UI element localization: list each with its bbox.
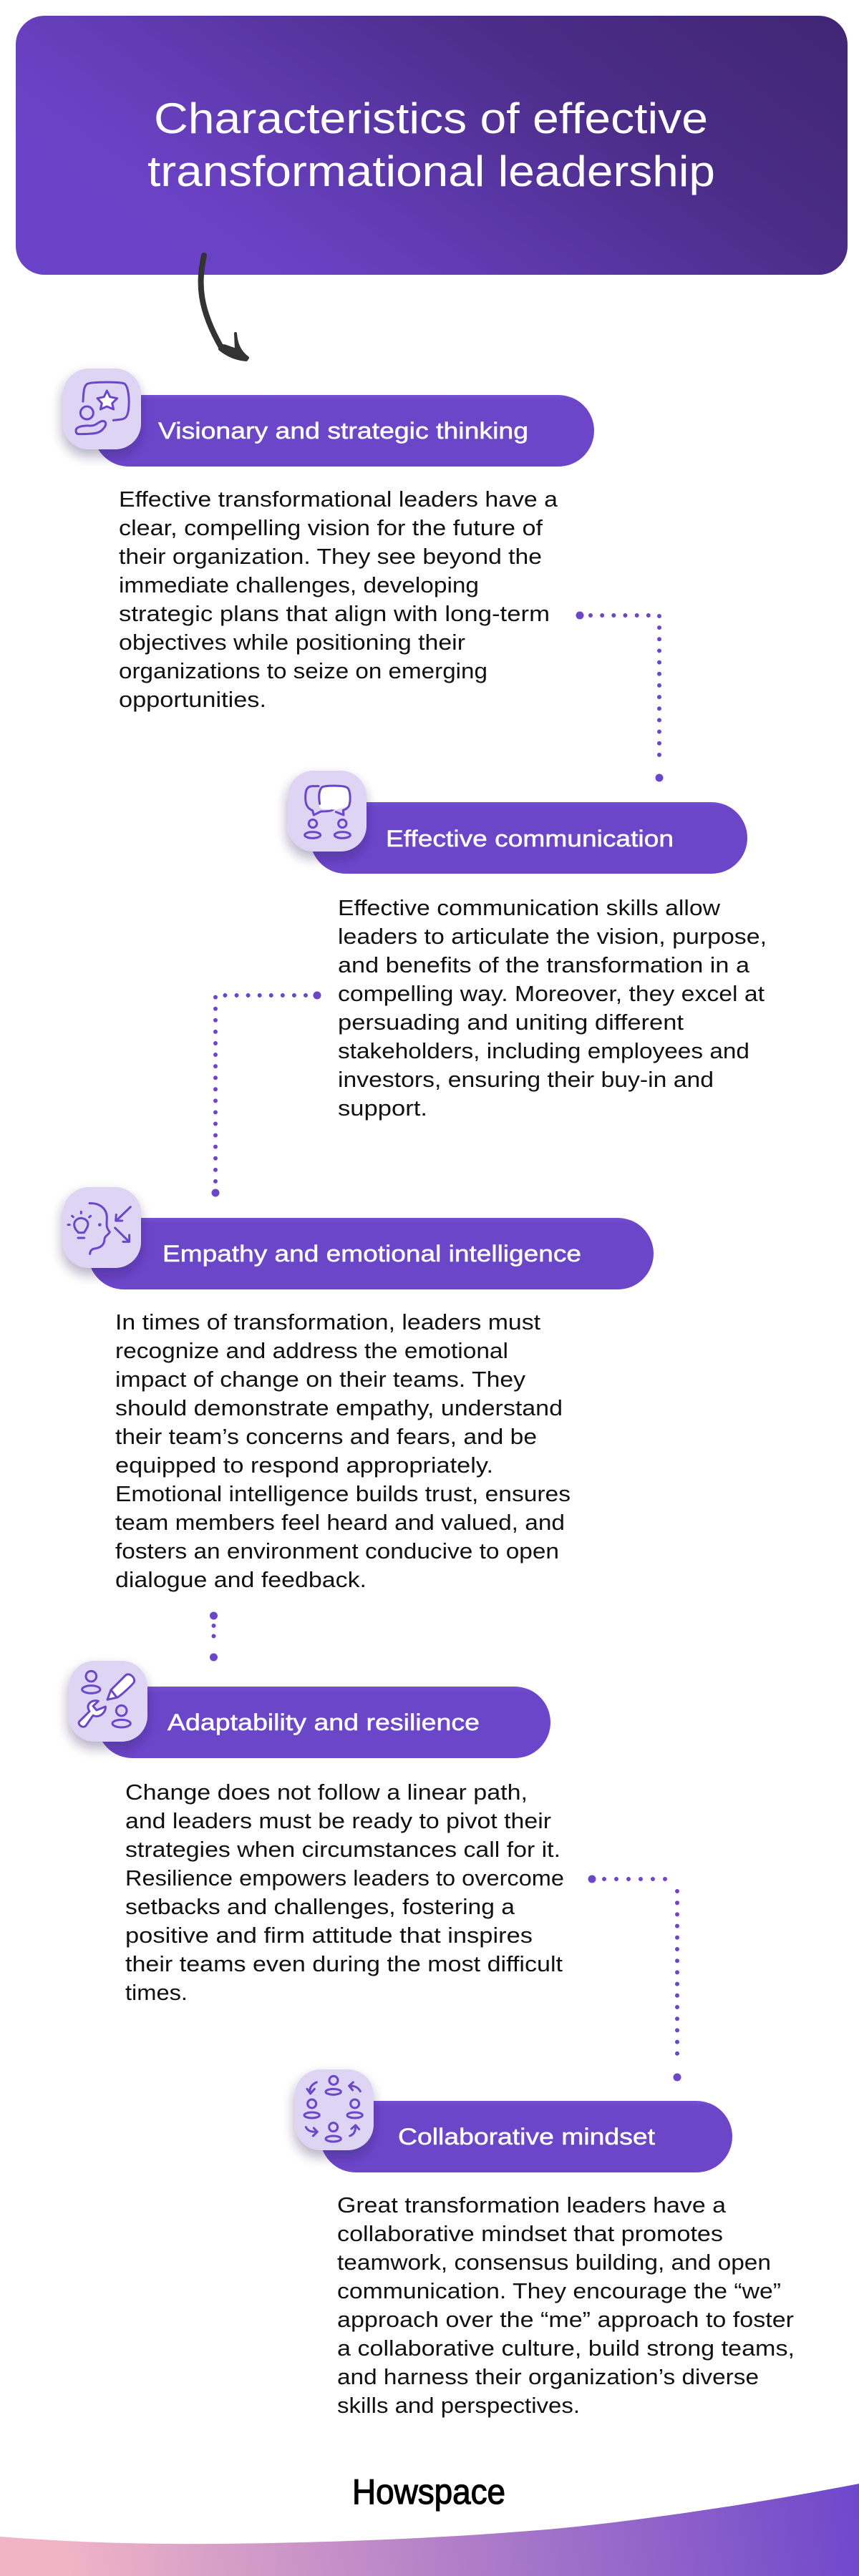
title: transformational leadership: [147, 147, 715, 195]
title: Characteristics of effective: [154, 94, 708, 142]
body text: immediate challenges, developing: [119, 572, 479, 597]
body text: their teams even during the most difficult: [125, 1951, 563, 1976]
dotted connector 3: [210, 1611, 218, 1662]
body text: collaborative mindset that promotes: [337, 2221, 723, 2246]
heading pill: [93, 395, 594, 467]
panel: effective communication: [288, 771, 767, 1121]
heading pill: [88, 1218, 654, 1289]
arrow: header to first item: [201, 255, 248, 360]
body text: [115, 1309, 571, 1592]
body text: positive and firm attitude that inspires: [125, 1923, 533, 1948]
body text: stakeholders, including employees and: [338, 1038, 749, 1063]
body text: [337, 2192, 795, 2418]
dotted connector 4: [588, 1875, 681, 2081]
body text: their organization. They see beyond the: [119, 544, 542, 569]
body text: Great transformation leaders have a: [337, 2192, 727, 2218]
body text: and leaders must be ready to pivot their: [125, 1808, 551, 1833]
body text: strategies when circumstances call for it.: [125, 1837, 560, 1862]
body text: impact of change on their teams. They: [115, 1367, 526, 1392]
footer wave: [0, 2484, 859, 2576]
body text: support.: [338, 1096, 427, 1121]
body text: communication. They encourage the “we”: [337, 2278, 781, 2303]
body text: should demonstrate empathy, understand: [115, 1395, 563, 1420]
body text: equipped to respond appropriately.: [115, 1453, 493, 1478]
panel: empathy and emotional intelligence: [63, 1187, 654, 1592]
body text: Effective transformational leaders have a: [119, 487, 558, 512]
body text: objectives while positioning their: [119, 630, 465, 655]
body text: strategic plans that align with long-term: [119, 601, 550, 626]
body text: In times of transformation, leaders must: [115, 1309, 540, 1335]
body text: fosters an environment conducive to open: [115, 1538, 559, 1563]
dotted connector 2: [212, 992, 321, 1196]
body text: opportunities.: [119, 687, 266, 712]
body text: their team’s concerns and fears, and be: [115, 1424, 537, 1449]
panel: collaborative mindset: [295, 2069, 795, 2418]
body text: and benefits of the transformation in a: [338, 952, 750, 977]
body text: clear, compelling vision for the future of: [119, 515, 543, 540]
body text: skills and perspectives.: [337, 2393, 580, 2418]
heading pill: Empathy and emotional intelligence: [162, 1241, 581, 1267]
body text: and harness their organization’s diverse: [337, 2364, 759, 2389]
logo: Howspace: Howspace: [352, 2473, 505, 2512]
body text: organizations to seize on emerging: [119, 658, 487, 683]
panel: visionary and strategic thinking: [63, 369, 594, 712]
body text: [125, 1780, 564, 2005]
heading pill: Effective communication: [386, 826, 674, 852]
heading pill: Visionary and strategic thinking: [158, 418, 528, 444]
icon: presenter with star: [63, 369, 141, 449]
body text: Emotional intelligence builds trust, ensures: [115, 1481, 571, 1506]
icon: circle of people with arrows: [295, 2069, 374, 2150]
body text: recognize and address the emotional: [115, 1338, 508, 1363]
body text: setbacks and challenges, fostering a: [125, 1894, 515, 1919]
body text: compelling way. Moreover, they excel at: [338, 981, 765, 1006]
heading pill: Adaptability and resilience: [168, 1709, 480, 1735]
panel: adaptability and resilience: [69, 1661, 564, 2005]
body text: teamwork, consensus building, and open: [337, 2250, 771, 2275]
body text: team members feel heard and valued, and: [115, 1510, 565, 1535]
body text: dialogue and feedback.: [115, 1567, 367, 1592]
body text: investors, ensuring their buy-in and: [338, 1067, 714, 1092]
panel: header: [16, 16, 848, 275]
body text: Effective communication skills allow: [338, 895, 721, 920]
body text: persuading and uniting different: [338, 1010, 684, 1035]
heading pill: Collaborative mindset: [398, 2124, 655, 2150]
icon: people, pencil and wrench: [69, 1661, 147, 1742]
body text: [119, 487, 558, 712]
heading pill: [320, 2101, 732, 2172]
heading pill: [310, 802, 747, 874]
body text: approach over the “me” approach to foster: [337, 2307, 794, 2332]
body text: Resilience empowers leaders to overcome: [125, 1865, 564, 1890]
body text: [338, 895, 767, 1121]
body text: leaders to articulate the vision, purpose,: [338, 924, 767, 949]
body text: Change does not follow a linear path,: [125, 1780, 528, 1805]
dotted connector 1: [576, 611, 663, 781]
icon: head with light bulb and arrows: [63, 1187, 141, 1268]
title: [147, 94, 715, 195]
icon: two speech bubbles and people: [288, 771, 367, 852]
body text: times.: [125, 1980, 188, 2005]
body text: a collaborative culture, build strong teams,: [337, 2336, 795, 2361]
heading pill: [97, 1687, 550, 1758]
